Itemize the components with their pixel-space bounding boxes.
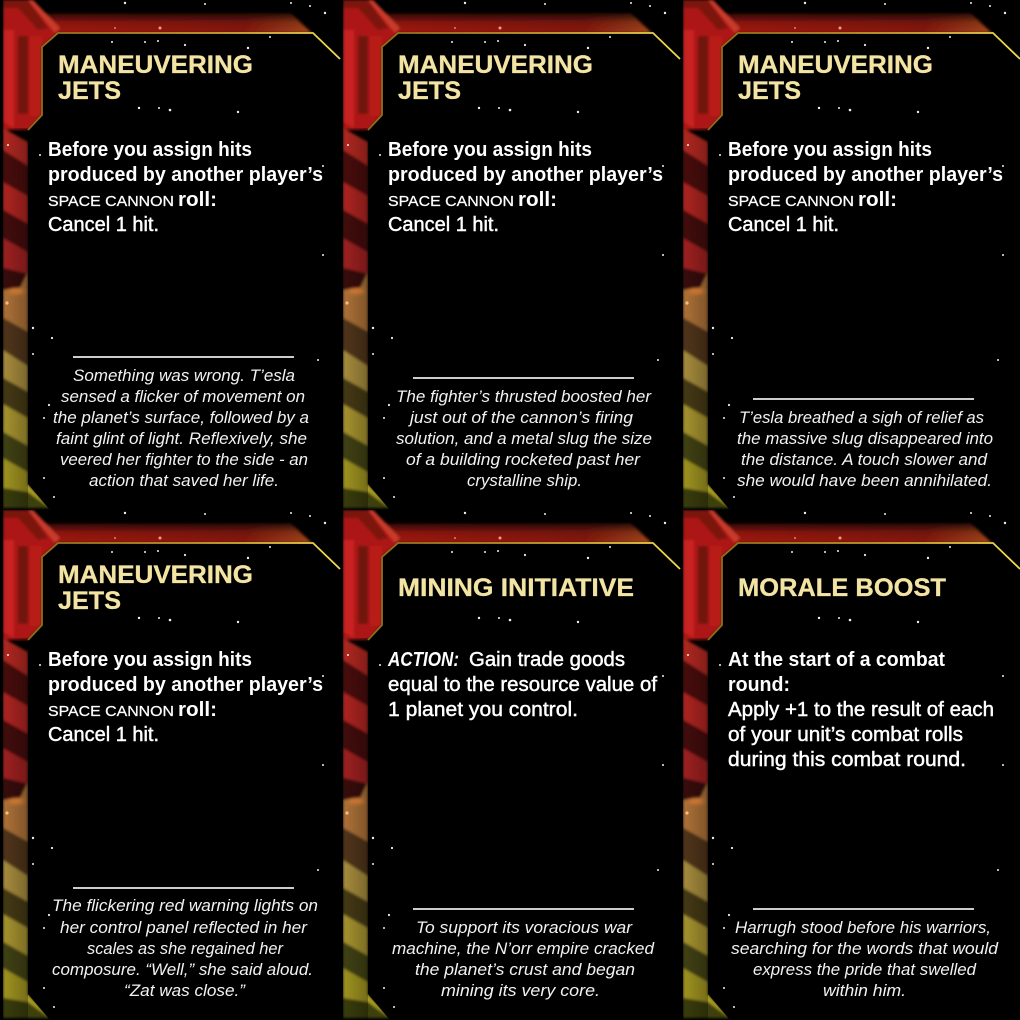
flavor text: scales as she regained her — [87, 939, 284, 958]
flavor text: To support its voracious war — [416, 918, 633, 937]
flavor text: within him. — [823, 981, 906, 1000]
title — [58, 561, 253, 615]
rule text: produced by another player’s — [728, 164, 1003, 186]
rule text: round: — [728, 674, 790, 696]
rule text: Before you assign hits — [48, 649, 252, 671]
rule text: ACTION: — [387, 649, 459, 671]
flavor text: solution, and a metal slug the size — [396, 429, 652, 448]
flavor text: of a building rocketed past her — [406, 450, 641, 469]
rule text: of your unit’s combat rolls — [728, 724, 963, 746]
title: MANEUVERING — [58, 561, 253, 589]
rule text: roll: — [518, 189, 557, 211]
flavor text: The fighter’s thrusted boosted her — [396, 387, 652, 406]
card frame — [3, 0, 340, 510]
title — [58, 51, 253, 105]
rule text: roll: — [178, 699, 217, 721]
flavor text — [53, 356, 309, 490]
rule text: Cancel 1 hit. — [388, 214, 499, 236]
card frame — [343, 510, 680, 1020]
rule text: Gain trade goods — [469, 649, 625, 671]
panel: card 2 maneuvering jets — [343, 0, 680, 510]
rule text: At the start of a combat — [728, 649, 945, 671]
panel: card 5 mining initiative — [343, 510, 680, 1020]
flavor text: machine, the N’orr empire cracked — [392, 939, 655, 958]
title: MANEUVERING — [398, 51, 593, 79]
panel: card 1 maneuvering jets — [3, 0, 340, 510]
flavor text: mining its very core. — [441, 981, 600, 1000]
title: MANEUVERING — [738, 51, 933, 79]
flavor text: she would have been annihilated. — [737, 471, 992, 490]
flavor text: her control panel reflected in her — [60, 918, 308, 937]
flavor text: just out of the cannon’s firing — [408, 408, 634, 427]
flavor text — [396, 377, 652, 490]
flavor text — [737, 398, 993, 490]
flavor text: the planet’s surface, followed by a — [53, 408, 309, 427]
rule text: Before you assign hits — [388, 139, 592, 161]
rule text: Before you assign hits — [48, 139, 252, 161]
flavor text — [392, 908, 655, 1000]
flavor text: composure. “Well,” she said aloud. — [52, 960, 313, 979]
panel: card 3 maneuvering jets — [683, 0, 1020, 510]
rule text: roll: — [858, 189, 897, 211]
rule text: SPACE CANNON — [48, 193, 174, 210]
flavor text — [731, 908, 999, 1000]
card frame — [683, 510, 1020, 1020]
flavor text: Harrugh stood before his warriors, — [735, 918, 991, 937]
title — [398, 51, 593, 105]
rule text — [48, 649, 323, 746]
rule text: Cancel 1 hit. — [48, 214, 159, 236]
card frame — [683, 0, 1020, 510]
rule text: 1 planet you control. — [388, 699, 578, 721]
flavor text: veered her fighter to the side - an — [60, 450, 308, 469]
rule text: produced by another player’s — [48, 164, 323, 186]
flavor text: searching for the words that would — [731, 939, 999, 958]
card frame — [3, 510, 340, 1020]
flavor text: T’esla breathed a sigh of relief as — [739, 408, 984, 427]
rule text: Before you assign hits — [728, 139, 932, 161]
rule text: SPACE CANNON — [388, 193, 514, 210]
flavor text: express the pride that swelled — [753, 960, 977, 979]
flavor text: the planet’s crust and began — [415, 960, 635, 979]
card frame — [343, 0, 680, 510]
rule text: produced by another player’s — [388, 164, 663, 186]
flavor text: the distance. A touch slower and — [741, 450, 988, 469]
rule text: SPACE CANNON — [48, 703, 174, 720]
panel: card 4 maneuvering jets — [3, 510, 340, 1020]
flavor text: “Zat was close.” — [124, 981, 246, 1000]
flavor text: faint glint of light. Reflexively, she — [56, 429, 307, 448]
rule text — [387, 649, 657, 721]
title: JETS — [738, 77, 801, 105]
title — [738, 51, 933, 105]
title: MINING INITIATIVE — [398, 574, 634, 602]
rule text — [728, 139, 1003, 236]
flavor text — [52, 887, 318, 1000]
rule text: roll: — [178, 189, 217, 211]
rule text: during this combat round. — [728, 749, 966, 771]
title: JETS — [398, 77, 461, 105]
title: JETS — [58, 77, 121, 105]
flavor text: The flickering red warning lights on — [52, 896, 318, 915]
rule text: produced by another player’s — [48, 674, 323, 696]
rule text: SPACE CANNON — [728, 193, 854, 210]
rule text — [728, 649, 994, 771]
title: MANEUVERING — [58, 51, 253, 79]
title: MORALE BOOST — [738, 574, 946, 602]
panel: card 6 morale boost — [683, 510, 1020, 1020]
flavor text: action that saved her life. — [89, 471, 279, 490]
rule text — [388, 139, 663, 236]
rule text — [48, 139, 323, 236]
flavor text: Something was wrong. T’esla — [73, 366, 295, 385]
rule text: Cancel 1 hit. — [728, 214, 839, 236]
flavor text: the massive slug disappeared into — [737, 429, 993, 448]
rule text: Apply +1 to the result of each — [728, 699, 994, 721]
rule text: equal to the resource value of — [388, 674, 657, 696]
title: JETS — [58, 587, 121, 615]
flavor text: crystalline ship. — [467, 471, 582, 490]
flavor text: sensed a flicker of movement on — [61, 387, 305, 406]
rule text: Cancel 1 hit. — [48, 724, 159, 746]
